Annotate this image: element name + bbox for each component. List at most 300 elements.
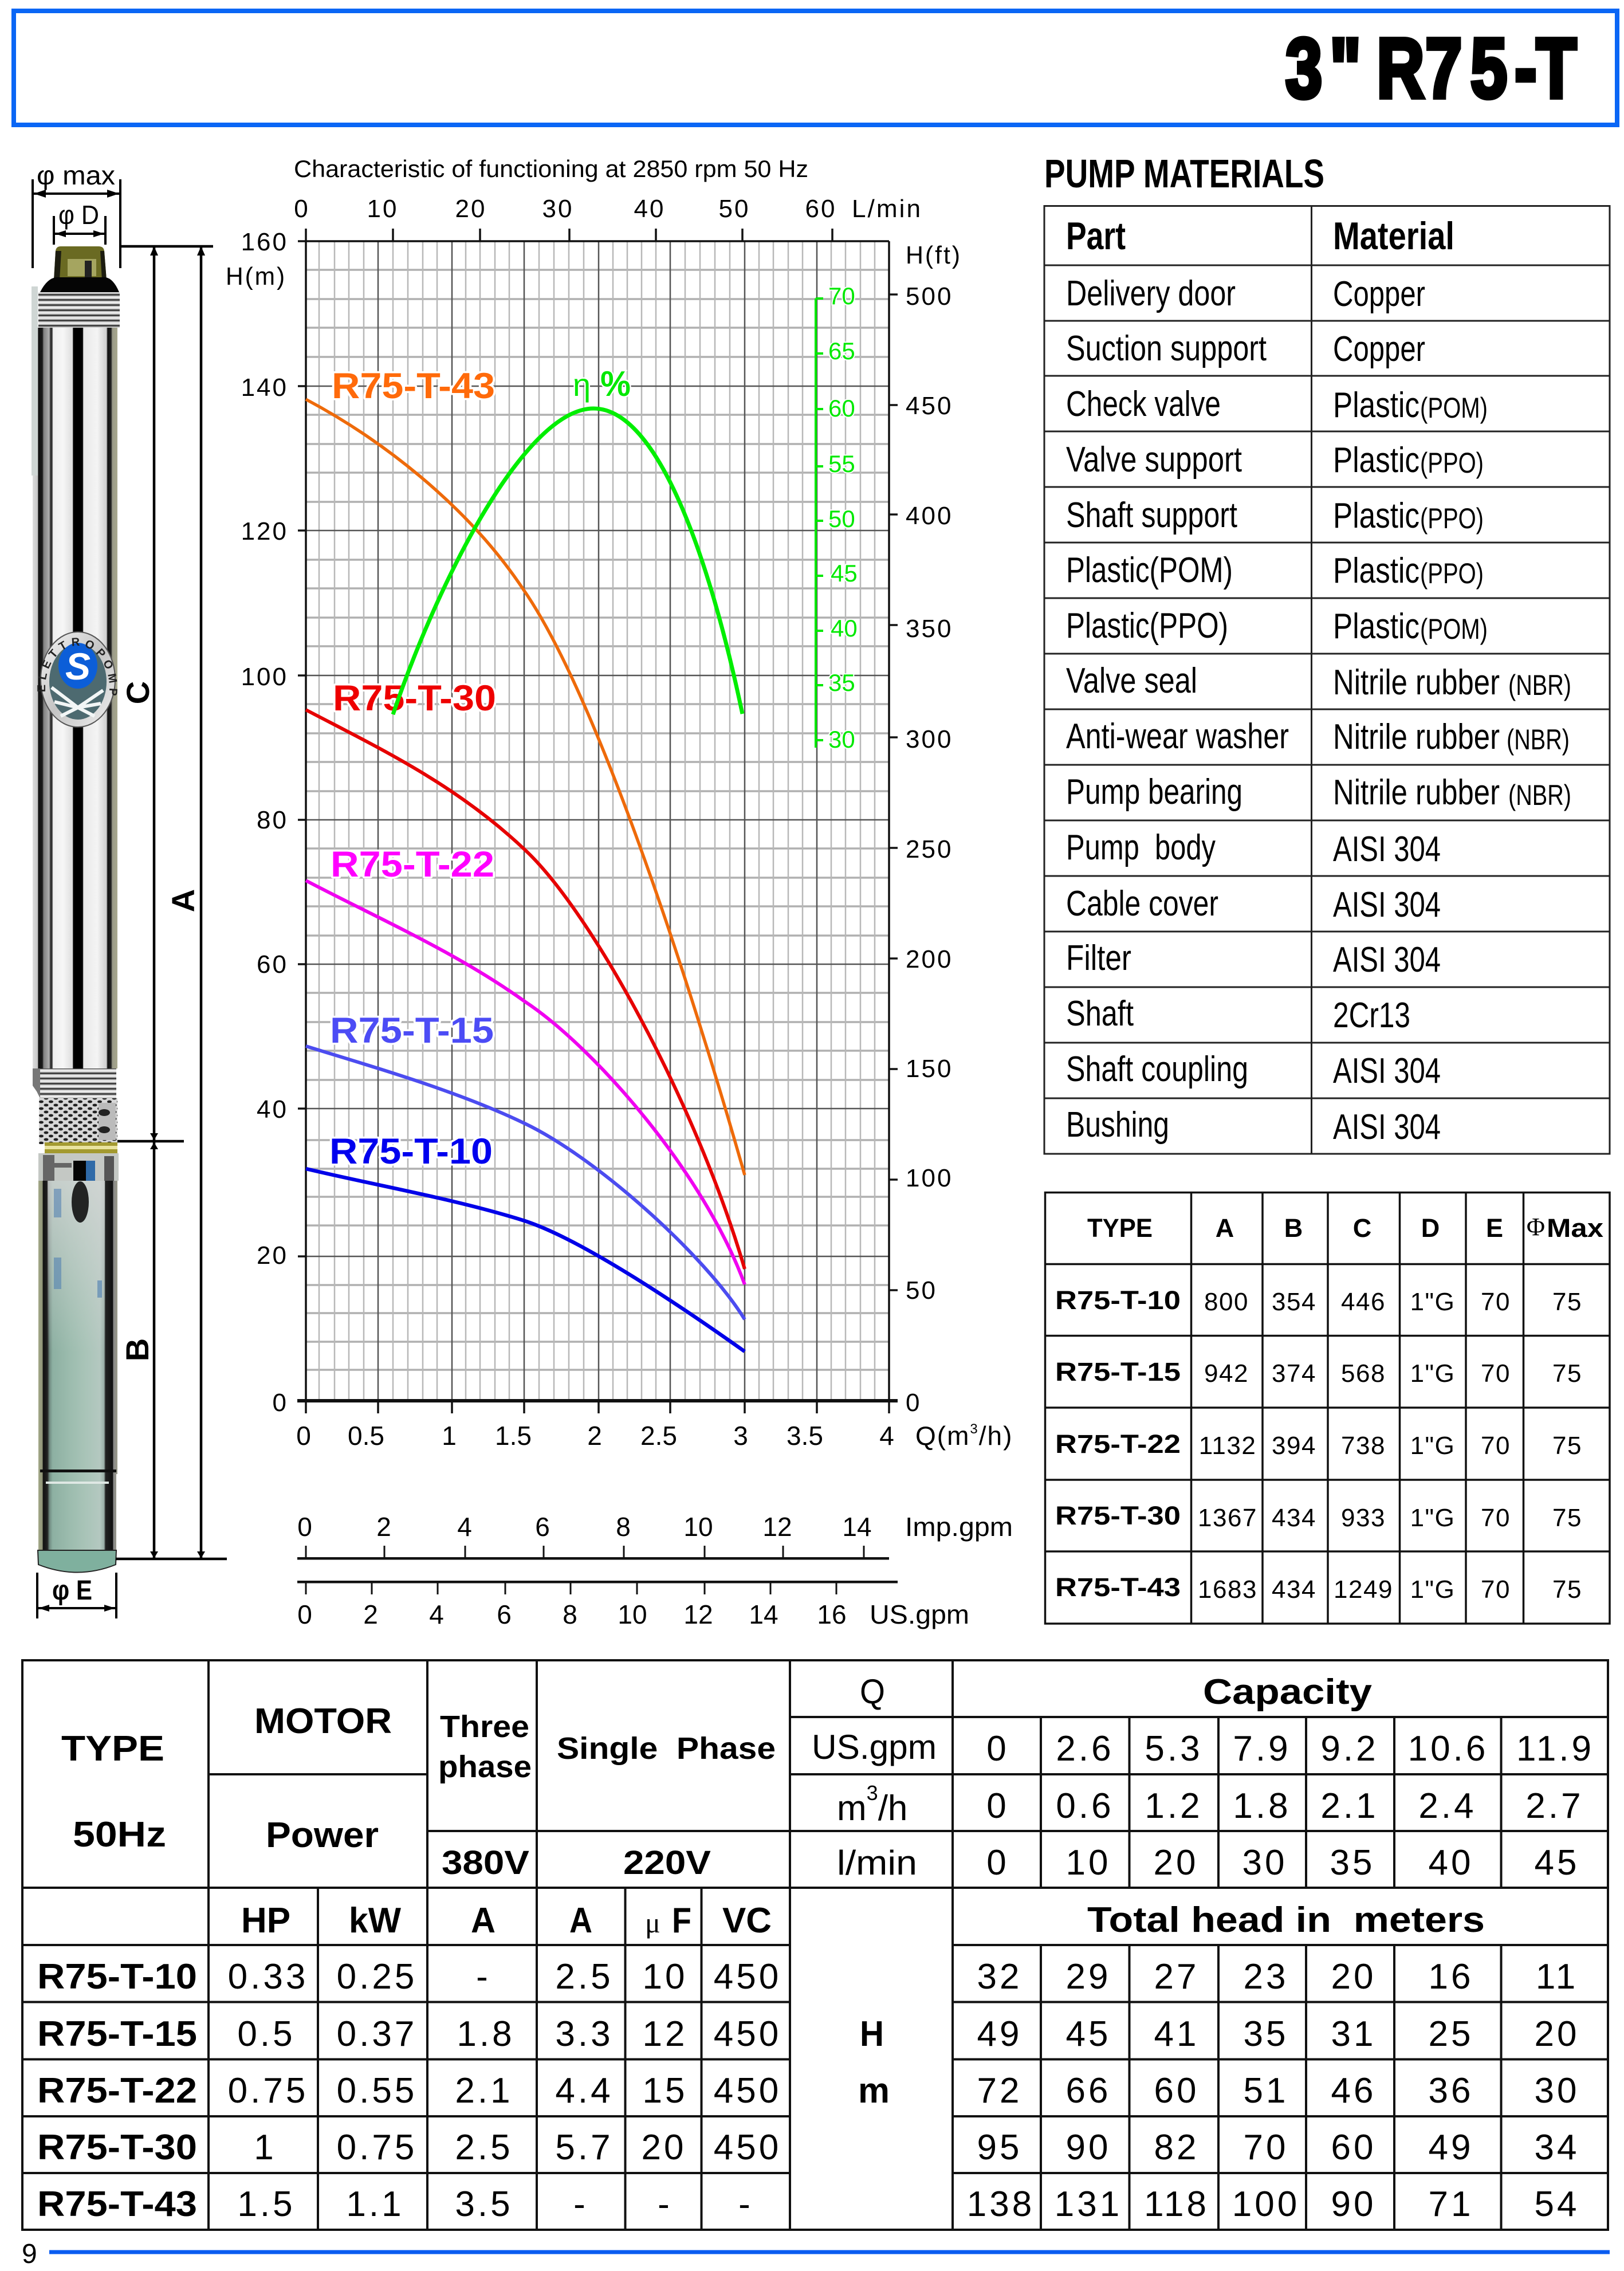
materials rows: AISI 304 bbox=[1333, 940, 1441, 980]
right axis labels H(ft): 200 bbox=[906, 945, 953, 973]
left axis labels H(m): 140 bbox=[241, 374, 288, 402]
materials rows: (POM) bbox=[1420, 392, 1488, 424]
bottom axis labels Q: 0.5 bbox=[348, 1421, 384, 1451]
efficiency curve bbox=[393, 408, 742, 714]
top axis labels L/min: 20 bbox=[455, 195, 486, 223]
l/min row: 0 bbox=[986, 1843, 1009, 1883]
units row: A bbox=[569, 1901, 592, 1940]
head row R75-T-10: 27 bbox=[1154, 1957, 1199, 1997]
US.gpm scale: US.gpm bbox=[870, 1600, 969, 1629]
left axis labels H(m): 0 bbox=[273, 1389, 288, 1417]
motor row R75-T-10: 450 bbox=[714, 1957, 781, 1997]
head row R75-T-10: 11 bbox=[1536, 1957, 1578, 1997]
materials rows: (PPO) bbox=[1420, 502, 1484, 535]
US.gpm row: 5.3 bbox=[1145, 1729, 1203, 1769]
dimensions row R75-T-15: 75 bbox=[1552, 1360, 1582, 1388]
dimensions row R75-T-43: 75 bbox=[1552, 1575, 1582, 1604]
head row R75-T-43 bbox=[967, 2184, 1579, 2224]
l/min row: 40 bbox=[1429, 1843, 1473, 1883]
right axis labels H(ft): 250 bbox=[906, 835, 953, 863]
m3/h row: 2.1 bbox=[1320, 1786, 1379, 1826]
table: dimensions bbox=[1045, 1193, 1610, 1624]
motor row R75-T-43: 3.5 bbox=[455, 2184, 513, 2224]
efficiency scale: 50 bbox=[828, 505, 855, 532]
units row: kW bbox=[349, 1901, 401, 1940]
materials rows: Nitrile rubber bbox=[1333, 663, 1500, 702]
motor row R75-T-43 bbox=[37, 2184, 753, 2224]
motor row R75-T-30: 20 bbox=[642, 2128, 686, 2167]
H m label: H bbox=[860, 2014, 884, 2054]
motor row R75-T-22: 4.4 bbox=[555, 2071, 614, 2111]
head row R75-T-43: 138 bbox=[967, 2184, 1035, 2224]
dimensions row R75-T-30: 75 bbox=[1552, 1504, 1582, 1532]
logo badge: S bbox=[65, 645, 91, 687]
heading: pump materials: PUMP MATERIALS bbox=[1044, 151, 1324, 196]
chart title: Characteristic of functioning at 2850 rpm 50 Hz bbox=[294, 155, 808, 182]
bottom axis labels Q: 2 bbox=[587, 1421, 602, 1451]
Imp.gpm scale: 2 bbox=[376, 1512, 391, 1542]
left axis labels H(m): 60 bbox=[257, 950, 288, 979]
left axis labels H(m) bbox=[226, 228, 288, 1417]
m3/h row bbox=[837, 1781, 1584, 1828]
bottom axis labels Q: 0 bbox=[296, 1421, 311, 1451]
materials rows bbox=[1066, 274, 1571, 1147]
right axis labels H(ft): 450 bbox=[906, 392, 953, 420]
bottom axis labels Q: 1 bbox=[442, 1421, 457, 1451]
head row R75-T-43: 71 bbox=[1429, 2184, 1473, 2224]
materials rows: Copper bbox=[1333, 274, 1425, 314]
total head heading: Total head in meters bbox=[1087, 1900, 1485, 1940]
motor row R75-T-30: 0.75 bbox=[337, 2128, 417, 2167]
dimension lines A B C bbox=[116, 246, 227, 1559]
head row R75-T-30: 70 bbox=[1244, 2128, 1288, 2167]
motor row R75-T-22: 2.1 bbox=[455, 2071, 513, 2111]
bottom axis labels Q: 4 bbox=[879, 1421, 894, 1451]
motor row R75-T-22: 0.75 bbox=[228, 2071, 308, 2111]
motor header block: TYPE bbox=[61, 1729, 164, 1769]
left axis labels H(m): 80 bbox=[257, 806, 288, 834]
m3/h row: 1.8 bbox=[1233, 1786, 1291, 1826]
capacity heading: Q bbox=[860, 1672, 885, 1711]
efficiency scale: 65 bbox=[828, 337, 855, 364]
head row R75-T-43: 118 bbox=[1144, 2184, 1209, 2224]
top axis labels L/min bbox=[294, 195, 922, 223]
motor row R75-T-30: 1 bbox=[254, 2128, 277, 2167]
materials rows: Plastic bbox=[1333, 496, 1419, 536]
motor row R75-T-10 bbox=[37, 1957, 781, 1997]
Imp.gpm scale: 0 bbox=[297, 1512, 312, 1542]
head row R75-T-30 bbox=[977, 2128, 1579, 2167]
dimensions row R75-T-22: 70 bbox=[1481, 1432, 1511, 1460]
right axis labels H(ft): 350 bbox=[906, 615, 953, 643]
l/min row: 20 bbox=[1154, 1843, 1198, 1883]
US.gpm row: 11.9 bbox=[1516, 1729, 1594, 1769]
Imp.gpm scale: 10 bbox=[683, 1512, 713, 1542]
motor row R75-T-30: 450 bbox=[714, 2128, 781, 2167]
l/min row: 45 bbox=[1535, 1843, 1579, 1883]
m3/h row: 2.7 bbox=[1525, 1786, 1584, 1826]
phi D dimension: φ D bbox=[58, 200, 99, 230]
efficiency scale: 45 bbox=[831, 560, 858, 587]
head row R75-T-22: 66 bbox=[1066, 2071, 1111, 2111]
US.gpm scale: 6 bbox=[497, 1600, 512, 1629]
materials header: Part bbox=[1066, 214, 1126, 258]
curve R75-T-22 bbox=[306, 881, 745, 1284]
dimensions row R75-T-30: 1"G bbox=[1410, 1504, 1455, 1532]
motor row R75-T-10: - bbox=[476, 1957, 491, 1997]
head row R75-T-10: 20 bbox=[1331, 1957, 1376, 1997]
materials rows: Check valve bbox=[1066, 384, 1221, 424]
table: pump materials bbox=[1044, 206, 1610, 1154]
motor row R75-T-43: R75-T-43 bbox=[37, 2184, 197, 2224]
materials rows: Plastic bbox=[1333, 607, 1419, 646]
motor header block: Three bbox=[440, 1710, 529, 1744]
dimensions row R75-T-22: R75-T-22 bbox=[1055, 1429, 1181, 1459]
right axis labels H(ft): 500 bbox=[906, 282, 953, 311]
head row R75-T-22: 30 bbox=[1535, 2071, 1579, 2111]
motor row R75-T-15: 1.8 bbox=[457, 2014, 515, 2054]
head row R75-T-22: 72 bbox=[977, 2071, 1022, 2111]
Imp.gpm scale: 14 bbox=[842, 1512, 872, 1542]
head row R75-T-22: 46 bbox=[1331, 2071, 1376, 2111]
right axis labels H(ft): 150 bbox=[906, 1055, 953, 1083]
motor row R75-T-43: 1.1 bbox=[346, 2184, 404, 2224]
dimensions row R75-T-10: 354 bbox=[1272, 1288, 1316, 1316]
curve R75-T-30 bbox=[306, 710, 745, 1269]
head row R75-T-43: 131 bbox=[1055, 2184, 1122, 2224]
top axis labels L/min: L/min bbox=[852, 195, 922, 223]
curve label R75-T-22: R75-T-22 bbox=[331, 844, 494, 885]
head row R75-T-15: 41 bbox=[1154, 2014, 1199, 2054]
motor row R75-T-10: 10 bbox=[643, 1957, 687, 1997]
l/min row: 30 bbox=[1242, 1843, 1287, 1883]
materials rows: Nitrile rubber bbox=[1333, 717, 1500, 757]
performance chart bbox=[226, 155, 1013, 1629]
dimensions row R75-T-15: 374 bbox=[1272, 1360, 1316, 1388]
motor row R75-T-30 bbox=[37, 2128, 781, 2167]
motor row R75-T-22: R75-T-22 bbox=[37, 2071, 197, 2111]
US.gpm scale: 4 bbox=[429, 1600, 444, 1629]
dimensions row R75-T-15: R75-T-15 bbox=[1055, 1357, 1181, 1386]
motor row R75-T-43: - bbox=[738, 2184, 753, 2224]
materials rows: 2Cr13 bbox=[1333, 996, 1410, 1035]
head row R75-T-30: 82 bbox=[1154, 2128, 1199, 2167]
dimensions row R75-T-43 bbox=[1055, 1573, 1582, 1604]
bottom axis labels Q: 1.5 bbox=[495, 1421, 532, 1451]
materials rows: AISI 304 bbox=[1333, 1051, 1441, 1091]
materials rows: Plastic(PPO) bbox=[1066, 606, 1228, 646]
dimensions row R75-T-10: 75 bbox=[1552, 1288, 1582, 1316]
materials rows: (NBR) bbox=[1507, 724, 1570, 756]
left axis labels H(m): 40 bbox=[257, 1095, 288, 1123]
US.gpm scale: 10 bbox=[618, 1600, 647, 1629]
Imp.gpm scale bbox=[297, 1512, 1013, 1559]
motor row R75-T-15: 12 bbox=[643, 2014, 687, 2054]
materials header: Material bbox=[1333, 214, 1454, 258]
head row R75-T-10 bbox=[977, 1957, 1578, 1997]
US.gpm scale: 2 bbox=[363, 1600, 378, 1629]
H m label bbox=[858, 2014, 890, 2111]
motor row R75-T-22: 450 bbox=[714, 2071, 781, 2111]
dimensions row R75-T-30: 1367 bbox=[1198, 1504, 1257, 1532]
motor header block: 220V bbox=[623, 1844, 711, 1881]
dimensions row R75-T-43: R75-T-43 bbox=[1055, 1573, 1181, 1602]
materials rows: AISI 304 bbox=[1333, 830, 1441, 869]
materials rows: (PPO) bbox=[1420, 557, 1484, 590]
materials header bbox=[1066, 214, 1454, 258]
l/min row bbox=[837, 1843, 1579, 1883]
US.gpm row: 0 bbox=[986, 1729, 1009, 1769]
dimensions header: D bbox=[1421, 1213, 1440, 1243]
units row: VC bbox=[722, 1901, 772, 1940]
motor row R75-T-10: 2.5 bbox=[555, 1957, 614, 1997]
US.gpm row: 9.2 bbox=[1320, 1729, 1379, 1769]
head row R75-T-30: 60 bbox=[1331, 2128, 1376, 2167]
materials rows: (NBR) bbox=[1508, 669, 1571, 701]
label C: C bbox=[120, 681, 156, 704]
right axis labels H(ft): 400 bbox=[906, 502, 953, 530]
dimensions row R75-T-22: 394 bbox=[1272, 1432, 1316, 1460]
materials rows: Pump body bbox=[1066, 828, 1216, 867]
top axis labels L/min: 30 bbox=[542, 195, 573, 223]
materials rows: (NBR) bbox=[1508, 779, 1571, 811]
dimensions row R75-T-22: 75 bbox=[1552, 1432, 1582, 1460]
dimensions header: E bbox=[1486, 1213, 1503, 1243]
label A: A bbox=[165, 889, 201, 912]
head row R75-T-30: 34 bbox=[1535, 2128, 1579, 2167]
dimensions row R75-T-10: 1"G bbox=[1410, 1288, 1455, 1316]
dimensions row R75-T-43: 1683 bbox=[1198, 1575, 1257, 1604]
capacity heading: Capacity bbox=[1203, 1672, 1373, 1712]
right axis labels H(ft): 300 bbox=[906, 725, 953, 753]
dimensions row R75-T-30: 434 bbox=[1272, 1504, 1316, 1532]
US.gpm scale: 12 bbox=[683, 1600, 713, 1629]
dimensions row R75-T-43: 70 bbox=[1481, 1575, 1511, 1604]
dimensions row R75-T-15: 70 bbox=[1481, 1360, 1511, 1388]
materials rows: Delivery door bbox=[1066, 274, 1236, 313]
logo badge bbox=[37, 631, 117, 728]
left axis labels H(m): 120 bbox=[241, 517, 288, 545]
motor row R75-T-10: 0.25 bbox=[337, 1957, 417, 1997]
table: motor and capacity bbox=[22, 1660, 1608, 2230]
motor header block: 380V bbox=[442, 1844, 529, 1881]
Imp.gpm scale: 8 bbox=[616, 1512, 631, 1542]
head row R75-T-15: 25 bbox=[1429, 2014, 1473, 2054]
motor row R75-T-43: - bbox=[573, 2184, 588, 2224]
dimensions header bbox=[1087, 1213, 1603, 1243]
left axis labels H(m): 20 bbox=[257, 1241, 288, 1270]
pump body bbox=[32, 246, 120, 1572]
materials rows: Anti-wear washer bbox=[1066, 717, 1289, 756]
right axis labels H(ft): H(ft) bbox=[906, 241, 962, 269]
dimensions row R75-T-22: 738 bbox=[1341, 1432, 1386, 1460]
motor row R75-T-43: 1.5 bbox=[237, 2184, 296, 2224]
materials rows: Shaft coupling bbox=[1066, 1050, 1248, 1089]
dimensions row R75-T-30: R75-T-30 bbox=[1055, 1501, 1181, 1530]
title: 3" R75-T bbox=[1285, 21, 1576, 116]
dimensions row R75-T-10 bbox=[1055, 1286, 1582, 1316]
head row R75-T-10: 16 bbox=[1429, 1957, 1473, 1997]
top axis labels L/min: 0 bbox=[294, 195, 310, 223]
m3/h row: m bbox=[837, 1789, 867, 1828]
head row R75-T-10: 29 bbox=[1066, 1957, 1111, 1997]
l/min row: 10 bbox=[1066, 1843, 1111, 1883]
Imp.gpm scale: 12 bbox=[762, 1512, 792, 1542]
materials rows: Shaft bbox=[1066, 994, 1134, 1034]
motor row R75-T-15: 0.37 bbox=[337, 2014, 417, 2054]
efficiency label: % bbox=[600, 364, 631, 404]
materials rows: Valve seal bbox=[1066, 661, 1197, 701]
head row R75-T-15: 35 bbox=[1244, 2014, 1288, 2054]
motor row R75-T-30: 5.7 bbox=[555, 2128, 614, 2167]
dimensions row R75-T-15 bbox=[1055, 1357, 1582, 1388]
US.gpm row: 2.6 bbox=[1056, 1729, 1114, 1769]
dimensions header: Φ bbox=[1527, 1213, 1545, 1241]
dimensions row R75-T-10: 446 bbox=[1341, 1288, 1386, 1316]
motor row R75-T-15 bbox=[37, 2014, 781, 2054]
units row: μ bbox=[645, 1907, 660, 1939]
motor row R75-T-30: 2.5 bbox=[455, 2128, 513, 2167]
head row R75-T-30: 90 bbox=[1066, 2128, 1111, 2167]
phi E dimension bbox=[37, 1573, 116, 1618]
dimensions row R75-T-10: 70 bbox=[1481, 1288, 1511, 1316]
curve R75-T-43 bbox=[306, 399, 745, 1175]
materials rows: AISI 304 bbox=[1333, 1107, 1441, 1147]
curve label R75-T-43: R75-T-43 bbox=[332, 366, 495, 406]
materials rows: AISI 304 bbox=[1333, 885, 1441, 925]
dimensions row R75-T-22 bbox=[1055, 1429, 1582, 1460]
bottom axis labels Q: Q(m bbox=[915, 1421, 970, 1451]
materials rows: Valve support bbox=[1066, 440, 1242, 480]
US.gpm row: 10.6 bbox=[1408, 1729, 1488, 1769]
US.gpm scale: 0 bbox=[297, 1600, 312, 1629]
motor header block: Power bbox=[266, 1816, 379, 1855]
dimensions header: A bbox=[1216, 1213, 1234, 1243]
dimensions row R75-T-43: 1249 bbox=[1334, 1575, 1393, 1604]
head row R75-T-15: 20 bbox=[1535, 2014, 1579, 2054]
curve label R75-T-30: R75-T-30 bbox=[333, 678, 496, 718]
materials rows: Suction support bbox=[1066, 329, 1267, 368]
Imp.gpm scale: 4 bbox=[457, 1512, 472, 1542]
capacity heading bbox=[860, 1672, 1373, 1712]
chart axes bbox=[297, 229, 898, 1413]
phi max dimension: φ max bbox=[37, 160, 115, 190]
US.gpm row: 7.9 bbox=[1233, 1729, 1291, 1769]
right axis labels H(ft): 0 bbox=[906, 1389, 921, 1417]
motor row R75-T-15: R75-T-15 bbox=[37, 2014, 197, 2054]
pump illustration with dimension arrows bbox=[32, 160, 227, 1618]
head row R75-T-22: 60 bbox=[1154, 2071, 1199, 2111]
bottom axis labels Q: 2.5 bbox=[640, 1421, 677, 1451]
materials rows: (PPO) bbox=[1420, 447, 1484, 479]
head row R75-T-30: 95 bbox=[977, 2128, 1022, 2167]
m3/h row: 3 bbox=[867, 1781, 878, 1805]
US.gpm scale bbox=[297, 1581, 969, 1629]
efficiency scale: 40 bbox=[831, 615, 858, 642]
units row: F bbox=[672, 1901, 691, 1940]
dimensions row R75-T-10: 800 bbox=[1204, 1288, 1249, 1316]
materials rows: Copper bbox=[1333, 329, 1425, 369]
top axis labels L/min: 10 bbox=[367, 195, 398, 223]
efficiency scale: 70 bbox=[828, 282, 855, 309]
materials rows: Plastic(POM) bbox=[1066, 551, 1233, 590]
motor header block: 50Hz bbox=[73, 1815, 166, 1854]
left axis labels H(m): H(m) bbox=[226, 262, 286, 290]
materials rows: Cable cover bbox=[1066, 884, 1218, 924]
materials rows: Plastic bbox=[1333, 441, 1419, 480]
dimensions row R75-T-43: 1"G bbox=[1410, 1575, 1455, 1604]
left axis labels H(m): 160 bbox=[241, 228, 288, 256]
Imp.gpm scale: Imp.gpm bbox=[905, 1512, 1013, 1542]
US.gpm row: US.gpm bbox=[812, 1728, 937, 1766]
motor header block: phase bbox=[438, 1750, 532, 1784]
m3/h row: 2.4 bbox=[1418, 1786, 1477, 1826]
head row R75-T-30: 49 bbox=[1429, 2128, 1473, 2167]
top axis labels L/min: 60 bbox=[805, 195, 836, 223]
materials rows: Plastic bbox=[1333, 551, 1419, 591]
dimensions header: Max bbox=[1547, 1213, 1603, 1243]
Imp.gpm scale: 6 bbox=[535, 1512, 550, 1542]
motor header block: Single Phase bbox=[557, 1731, 776, 1766]
materials rows: Pump bearing bbox=[1066, 772, 1242, 812]
efficiency label: η bbox=[573, 367, 591, 403]
bottom axis labels Q: 3 bbox=[733, 1421, 748, 1451]
bottom axis labels Q: /h) bbox=[979, 1421, 1013, 1451]
US.gpm scale: 16 bbox=[817, 1600, 847, 1629]
motor row R75-T-15: 3.3 bbox=[555, 2014, 614, 2054]
left axis labels H(m): 100 bbox=[241, 663, 288, 691]
dimensions row R75-T-15: 942 bbox=[1204, 1360, 1249, 1388]
bottom axis labels Q bbox=[296, 1421, 1013, 1451]
top axis labels L/min: 40 bbox=[634, 195, 665, 223]
head row R75-T-15 bbox=[977, 2014, 1579, 2054]
head row R75-T-43: 90 bbox=[1331, 2184, 1376, 2224]
head row R75-T-10: 32 bbox=[977, 1957, 1022, 1997]
phi max dimension bbox=[33, 160, 120, 268]
motor row R75-T-15: 0.5 bbox=[237, 2014, 296, 2054]
materials rows: Filter bbox=[1066, 938, 1131, 978]
dimensions header: TYPE bbox=[1087, 1213, 1153, 1243]
dimensions row R75-T-15: 1"G bbox=[1410, 1360, 1455, 1388]
US.gpm scale: 14 bbox=[749, 1600, 778, 1629]
motor row R75-T-10: R75-T-10 bbox=[37, 1957, 197, 1997]
dimensions header: C bbox=[1353, 1213, 1371, 1243]
head row R75-T-43: 100 bbox=[1232, 2184, 1300, 2224]
right axis labels H(ft): 100 bbox=[906, 1164, 953, 1192]
header banner bbox=[14, 11, 1617, 125]
phi D dimension bbox=[54, 200, 105, 245]
curve label R75-T-15: R75-T-15 bbox=[330, 1011, 494, 1051]
label B: B bbox=[119, 1338, 155, 1361]
dimensions row R75-T-43: 434 bbox=[1272, 1575, 1316, 1604]
right axis labels H(ft) bbox=[906, 241, 962, 1417]
bottom axis labels Q: 3.5 bbox=[787, 1421, 823, 1451]
head row R75-T-15: 31 bbox=[1331, 2014, 1376, 2054]
phi E dimension: φ E bbox=[52, 1575, 92, 1606]
efficiency scale: 35 bbox=[828, 669, 855, 696]
materials rows: Nitrile rubber bbox=[1333, 773, 1500, 812]
motor row R75-T-15: 450 bbox=[714, 2014, 781, 2054]
efficiency scale: 30 bbox=[828, 726, 855, 753]
motor row R75-T-10: 0.33 bbox=[228, 1957, 308, 1997]
bottom axis labels Q: 3 bbox=[970, 1421, 979, 1437]
l/min row: l/min bbox=[837, 1844, 917, 1882]
dimensions row R75-T-30 bbox=[1055, 1501, 1582, 1532]
units row: HP bbox=[241, 1901, 290, 1940]
dimensions row R75-T-22: 1"G bbox=[1410, 1432, 1455, 1460]
dimensions row R75-T-15: 568 bbox=[1341, 1360, 1386, 1388]
materials rows: Bushing bbox=[1066, 1105, 1169, 1145]
